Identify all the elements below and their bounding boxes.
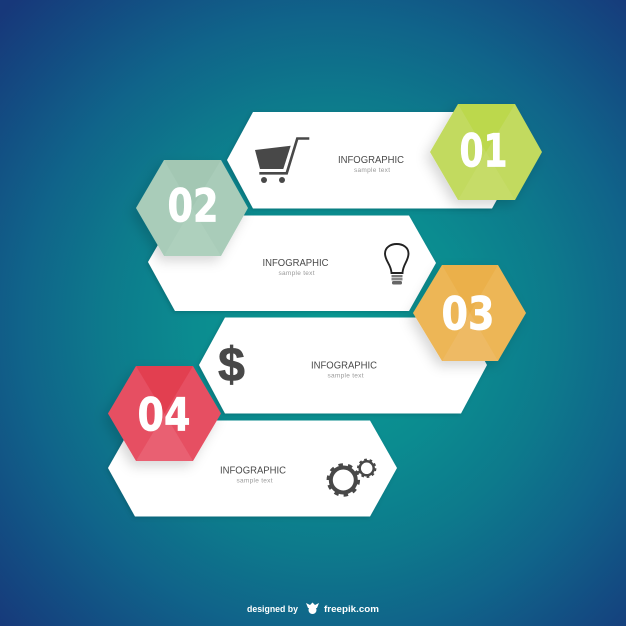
panel: step 03 — [199, 265, 526, 414]
text block 03: sample text — [328, 372, 364, 380]
icon: gears — [328, 460, 375, 495]
footer credit — [247, 602, 379, 615]
number 03: 03 — [442, 288, 494, 340]
text block 02 — [262, 258, 328, 277]
text block 02: sample text — [278, 270, 315, 277]
text block 01 — [338, 155, 404, 174]
text block 04: INFOGRAPHIC — [220, 466, 286, 476]
hexagon 04 — [108, 366, 221, 461]
text block 04: sample text — [236, 478, 273, 484]
panel: step 01 — [227, 104, 542, 208]
hexagon 02 — [136, 160, 248, 256]
text block 04 — [220, 466, 286, 484]
number 01: 01 — [460, 124, 508, 178]
number 02: 02 — [168, 180, 218, 232]
footer credit: designed by — [247, 604, 299, 615]
panel: step 02 — [136, 160, 436, 311]
banner 01 — [227, 112, 519, 208]
banner 02 — [148, 216, 436, 311]
text block 01: sample text — [354, 167, 390, 174]
text block 01: INFOGRAPHIC — [338, 155, 404, 166]
text block 02: INFOGRAPHIC — [262, 258, 328, 269]
hexagon 03 — [413, 265, 526, 361]
text block 03: INFOGRAPHIC — [311, 360, 377, 372]
hexagon 01 — [430, 104, 542, 200]
banner 04 — [108, 420, 397, 516]
icon: freepik logo — [306, 602, 319, 614]
icon: shopping cart — [255, 138, 309, 183]
text block 03 — [311, 360, 377, 380]
footer credit: freepik.com — [324, 604, 379, 615]
icon: light bulb — [385, 244, 408, 284]
icon: dollar sign: $ — [218, 339, 245, 392]
banner 03 — [199, 318, 487, 414]
number 04: 04 — [138, 388, 190, 442]
panel: step 04 — [108, 366, 397, 516]
